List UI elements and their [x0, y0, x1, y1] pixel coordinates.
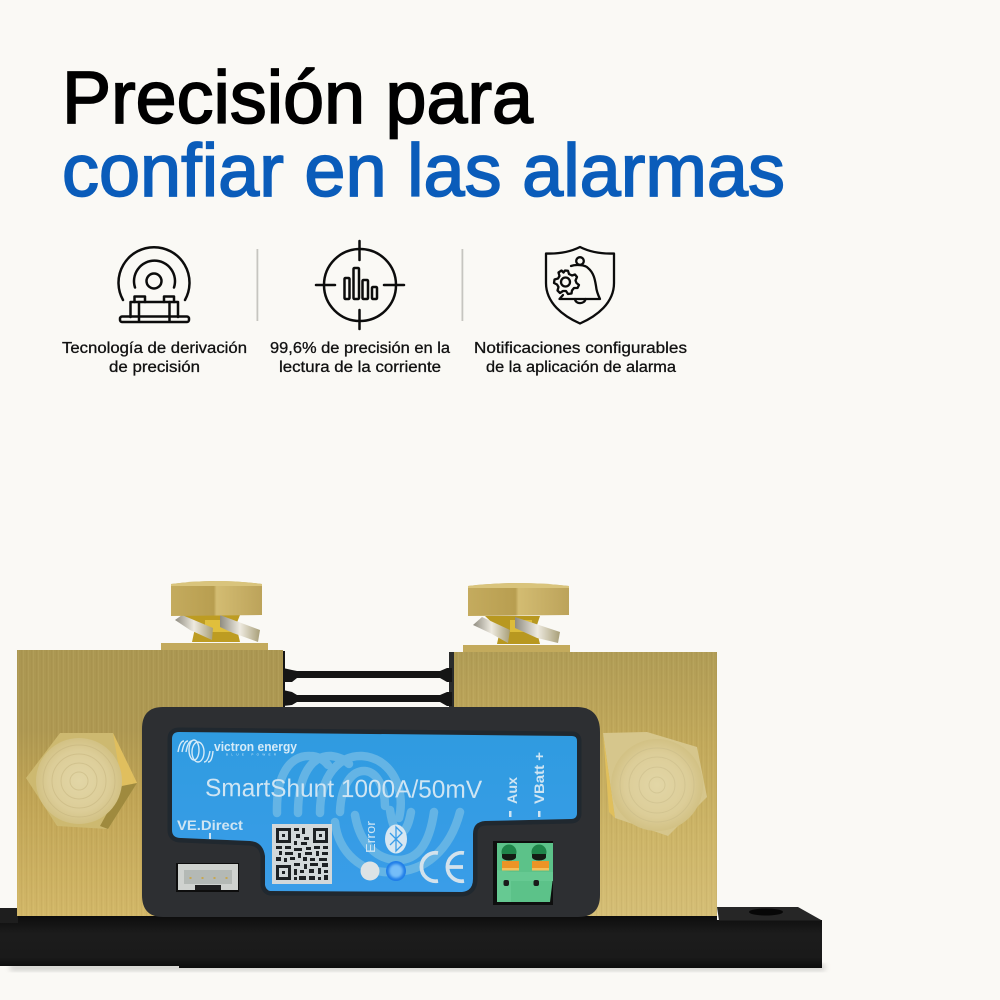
caption: alarm notifications: de la aplicación de alarma: [486, 359, 676, 376]
port label: VBatt: VBatt +: [532, 752, 547, 804]
logo: [178, 740, 297, 762]
icon: bluetooth: [385, 824, 407, 854]
left side bolt: [26, 733, 137, 829]
CE mark: [421, 853, 464, 881]
green terminal connector: [493, 841, 553, 905]
logo: BLUE POWER: [226, 752, 277, 756]
port label: Aux: [505, 776, 520, 817]
shunt resistor bars: [282, 651, 454, 707]
top left bolt: [161, 581, 268, 650]
port label: VE.Direct: [177, 817, 243, 839]
product name: SmartShunt 1000A/50mV: [205, 774, 482, 804]
caption: shunt technology: de precisión: [109, 359, 200, 376]
left brass block: [17, 650, 283, 916]
monitor housing: [142, 707, 600, 917]
logo: victron energy: [214, 740, 297, 754]
divider one: [256, 249, 258, 321]
status text: Error: Error: [363, 820, 378, 853]
caption: accuracy: 99,6% de precisión en la: [270, 340, 450, 357]
title: confiar en las alarmas: [62, 129, 785, 212]
caption: shunt technology: Tecnología de derivación: [62, 340, 247, 357]
icon: shield with bell and gear: [546, 247, 614, 324]
port label: Aux: Aux: [505, 776, 520, 804]
watermark swirl: [277, 756, 460, 872]
caption: accuracy: lectura de la corriente: [279, 359, 441, 376]
black mounting base: [0, 907, 822, 968]
blue label recess: [172, 732, 577, 892]
caption: accuracy: [270, 340, 450, 376]
right side bolt: [603, 732, 707, 836]
title: Precisión para: [62, 56, 534, 139]
QR code: [272, 824, 332, 884]
caption: alarm notifications: [474, 340, 687, 376]
blue label: [172, 732, 577, 892]
icon: crosshair with bars: [316, 241, 404, 329]
product photo: SmartShunt: [0, 581, 825, 970]
caption: shunt technology: [62, 340, 247, 376]
VE.Direct connector: [176, 863, 239, 892]
divider two: [462, 249, 463, 321]
right brass block: [454, 652, 717, 916]
base shadow: [10, 965, 825, 970]
top right bolt: [463, 583, 570, 652]
LED bluetooth: [386, 861, 406, 881]
caption: alarm notifications: Notificaciones configurables: [474, 340, 687, 357]
port label: VE.Direct: VE.Direct: [177, 817, 243, 833]
title: [62, 56, 785, 212]
icon: shunt with signal waves: [118, 247, 189, 322]
LED error: [360, 862, 380, 880]
